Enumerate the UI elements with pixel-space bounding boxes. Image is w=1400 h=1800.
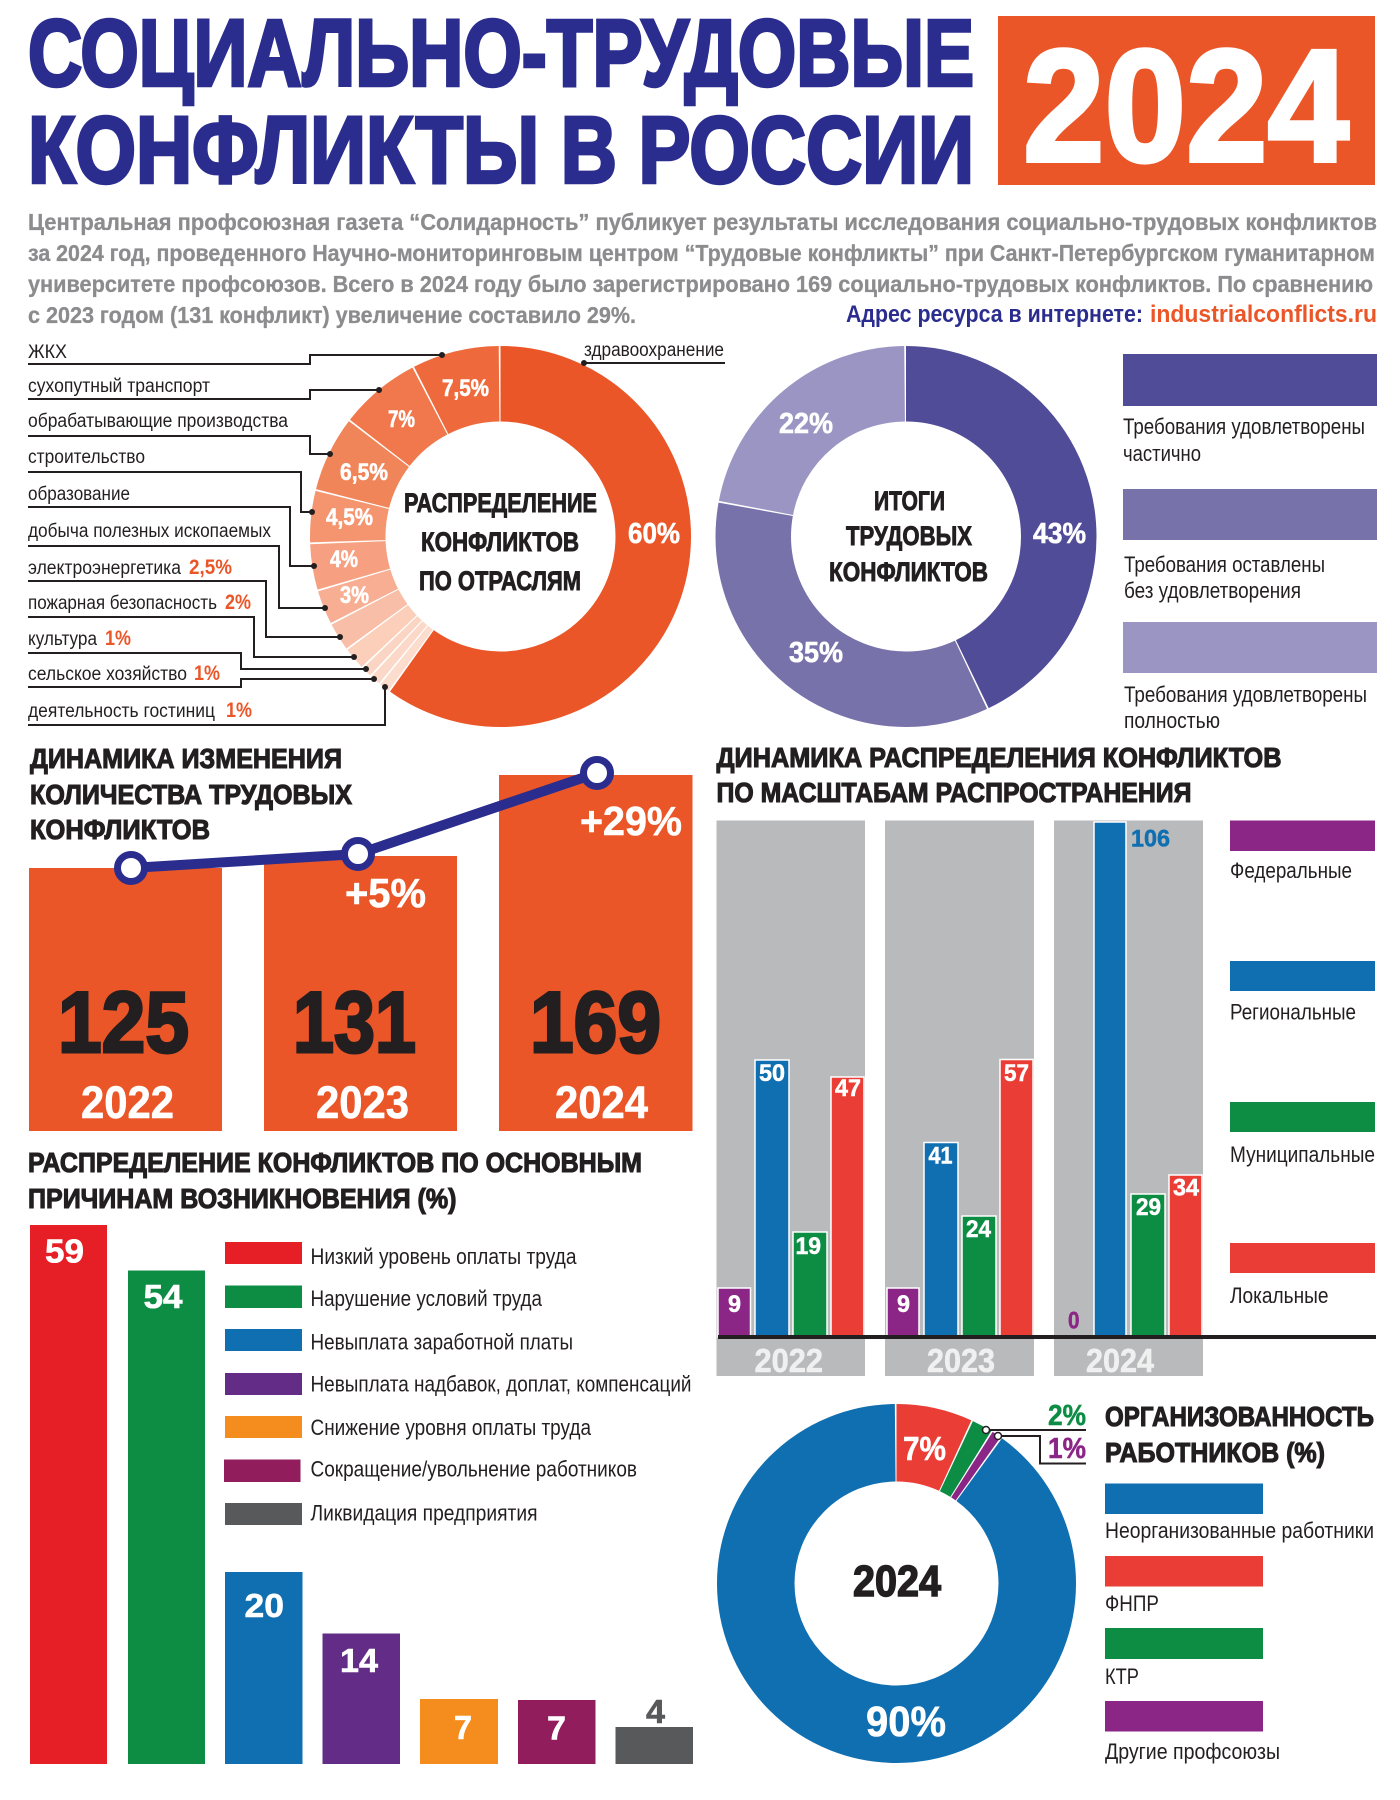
bar: 2023: 2023 [316, 1077, 409, 1128]
donut percentages [326, 375, 680, 609]
legend: fully satisfied: Требования удовлетворены [1124, 682, 1367, 707]
legend: not satisfied [1123, 489, 1377, 603]
legend: layoffs: Сокращение/увольнение работников [310, 1456, 637, 1482]
bar: 2023: +5% [345, 870, 426, 916]
legend: low wages: Низкий уровень оплаты труда [310, 1244, 577, 1269]
group: 2023 [885, 820, 1034, 1379]
panel: causes of conflicts [28, 1147, 693, 1764]
donut center title [404, 488, 597, 596]
results percentages: 35% [789, 637, 843, 669]
legend: локальные [1230, 1243, 1375, 1308]
donut center title: ПО ОТРАСЛЯМ [419, 566, 581, 596]
group: 2024 [1054, 820, 1203, 1379]
bar: 7 magenta [518, 1700, 596, 1764]
label: деятельность гостиниц [28, 684, 388, 725]
legend: unpaid wages [225, 1329, 573, 1354]
resource address: industrialconflicts.ru [1150, 301, 1377, 328]
label: сельское хозяйство: 1% [194, 662, 220, 685]
donut center title: РАСПРЕДЕЛЕНИЕ [404, 488, 597, 518]
label: пожарная безопасность [28, 591, 357, 660]
label: пожарная безопасность: пожарная безопасность [28, 593, 217, 614]
donut percentages: 3% [340, 582, 369, 609]
heading: РАСПРЕДЕЛЕНИЕ КОНФЛИКТОВ ПО ОСНОВНЫМ [28, 1147, 642, 1178]
donut values: 2024 [853, 1557, 941, 1606]
bar: 20 [225, 1572, 302, 1764]
donut percentages: 4% [330, 546, 358, 573]
bar: 2023 [264, 856, 457, 1131]
legend: ФНПР: ФНПР [1105, 1591, 1159, 1616]
heading: ДИНАМИКА РАСПРЕДЕЛЕНИЯ КОНФЛИКТОВ [716, 742, 1282, 773]
donut percentages: 4,5% [326, 504, 373, 531]
resource address [846, 301, 1377, 328]
legend: муниципальные [1230, 1102, 1375, 1167]
axis line [718, 1335, 1376, 1339]
bar: 20: 20 [244, 1587, 284, 1624]
year badge: 2024 [1023, 16, 1349, 195]
heading: РАБОТНИКОВ (%) [1105, 1437, 1325, 1468]
group: 2024: 29 [1136, 1194, 1161, 1221]
group: 2023: 41 [928, 1142, 952, 1170]
donut values: 7% [903, 1430, 946, 1467]
bar: 4: 4 [646, 1693, 666, 1730]
donut percentages: 7,5% [442, 375, 489, 402]
legend: fully satisfied [1123, 622, 1377, 733]
bar: 2022: 2022 [81, 1077, 174, 1128]
results center title: КОНФЛИКТОВ [829, 557, 988, 587]
legend: КТР: КТР [1105, 1664, 1139, 1689]
results center title: ТРУДОВЫХ [846, 521, 972, 551]
legend: wage reduction: Снижение уровня оплаты труда [310, 1415, 592, 1440]
label: строительство [28, 447, 315, 515]
label: образование: образование [28, 484, 130, 505]
bar: 2023: 131 [293, 975, 416, 1071]
legend: unpaid allowances: Невыплата надбавок, доплат, компенсаций [310, 1372, 692, 1396]
group: 2023: 9 [897, 1291, 910, 1318]
title: КОНФЛИКТЫ В РОССИИ [28, 98, 974, 204]
panel: results donut [753, 354, 1377, 733]
trend line [118, 760, 610, 882]
legend: liquidation: Ликвидация предприятия [310, 1500, 538, 1526]
donut percentages: 60% [628, 518, 680, 550]
label: ЖКХ: ЖКХ [28, 342, 67, 363]
bar: 2024: 169 [530, 975, 661, 1071]
bar: 59: 59 [45, 1232, 84, 1270]
legend: unpaid wages: Невыплата заработной платы [310, 1330, 573, 1354]
label: сухопутный транспорт: сухопутный транспорт [28, 376, 210, 397]
label: сельское хозяйство [28, 662, 377, 687]
heading: КОЛИЧЕСТВА ТРУДОВЫХ [30, 779, 352, 810]
label: сухопутный транспорт [28, 376, 382, 399]
label: деятельность гостиниц: деятельность гостиниц [28, 701, 215, 722]
label: добыча полезных ископаемых [28, 521, 328, 611]
panel: distribution by industry donut [28, 340, 725, 725]
title: СОЦИАЛЬНО-ТРУДОВЫЕ [28, 0, 974, 106]
bar: 14 [322, 1634, 400, 1764]
legend: региональные: Региональные [1230, 1000, 1356, 1024]
bar: 2022: 125 [58, 975, 189, 1071]
donut center title: КОНФЛИКТОВ [421, 527, 579, 557]
legend: локальные: Локальные [1230, 1283, 1328, 1308]
results percentages [779, 408, 1086, 669]
legend: not satisfied: Требования оставлены [1124, 552, 1325, 577]
legend: wage reduction [225, 1415, 592, 1440]
bar: 2024: 2024 [555, 1077, 648, 1128]
bar: 7 magenta: 7 [547, 1710, 566, 1746]
group: 2022: 2022 [754, 1342, 823, 1379]
bar: 54: 54 [144, 1278, 183, 1315]
label: электроэнергетика [28, 556, 343, 640]
label: образование [28, 484, 317, 569]
bar: 4 [616, 1693, 693, 1764]
group: 2022: 50 [759, 1060, 785, 1087]
legend: partially satisfied: Требования удовлетворены [1123, 414, 1365, 439]
results center title: ИТОГИ [874, 486, 945, 516]
group: 2024: 0 [1068, 1308, 1080, 1334]
legend: partially satisfied [1123, 354, 1377, 466]
legend: other unions: Другие профсоюзы [1105, 1739, 1280, 1764]
group: 2023: 57 [1004, 1060, 1029, 1087]
legend: региональные [1230, 961, 1375, 1024]
label: культура: культура [28, 629, 97, 650]
legend: муниципальные: Муниципальные [1230, 1142, 1375, 1167]
label: обрабатывающие производства: обрабатывающие производства [28, 411, 288, 432]
label: электроэнергетика: электроэнергетика [28, 558, 181, 579]
label: ЖКХ [28, 342, 445, 364]
group: 2022: 9 [728, 1291, 741, 1318]
legend: ФНПР [1105, 1556, 1263, 1616]
intro text: с 2023 годом (131 конфликт) увеличение составило 29%. [28, 302, 636, 328]
donut: industries [348, 384, 653, 689]
group: 2023: 24 [966, 1216, 992, 1243]
group: 2022 [716, 820, 865, 1379]
label: добыча полезных ископаемых: добыча полезных ископаемых [28, 521, 271, 542]
donut: results [753, 384, 1059, 689]
group: 2024: 2024 [1086, 1342, 1155, 1379]
group: 2024: 106 [1131, 826, 1170, 852]
bar: 54 [128, 1270, 205, 1764]
donut values: 90% [866, 1698, 946, 1746]
panel: number of conflicts dynamics [29, 743, 692, 1131]
donut percentages: 6,5% [340, 459, 388, 486]
bar: 2024 [499, 775, 692, 1131]
results center title [829, 486, 988, 587]
legend: working conditions: Нарушение условий труда [310, 1286, 543, 1311]
group: 2022: 19 [796, 1233, 821, 1260]
donut: organization [756, 1443, 1037, 1724]
title [28, 0, 974, 204]
bar: 2022 [29, 868, 222, 1131]
panel: organization of workers [756, 1400, 1374, 1764]
heading [1105, 1401, 1374, 1468]
heading: ПРИЧИНАМ ВОЗНИКНОВЕНИЯ (%) [28, 1183, 456, 1214]
heading: ПО МАСШТАБАМ РАСПРОСТРАНЕНИЯ [716, 777, 1192, 808]
label: деятельность гостиниц: 1% [226, 699, 252, 722]
results percentages: 43% [1033, 518, 1086, 550]
legend: федеральные [1230, 820, 1375, 883]
donut values [853, 1430, 946, 1746]
bar: 59 [30, 1225, 107, 1764]
heading: КОНФЛИКТОВ [30, 814, 210, 845]
legend: layoffs [224, 1456, 637, 1482]
legend: КТР [1105, 1628, 1263, 1689]
panel: scale of conflicts dynamics [716, 742, 1376, 1379]
callout: 1%: 1% [1048, 1433, 1086, 1465]
legend: other unions [1105, 1701, 1280, 1764]
heading: ДИНАМИКА ИЗМЕНЕНИЯ [30, 743, 342, 774]
resource address: Адрес ресурса в интернете: [846, 301, 1143, 328]
bar: 7 orange [420, 1699, 498, 1764]
heading [716, 742, 1282, 808]
callout: 2%: 2% [1048, 1400, 1086, 1432]
label: культура [28, 627, 369, 672]
group: 2024: 34 [1173, 1174, 1200, 1202]
heading [28, 1147, 642, 1214]
group: 2022: 47 [835, 1075, 861, 1102]
legend: low wages [225, 1242, 577, 1269]
label: сельское хозяйство: сельское хозяйство [28, 664, 187, 685]
legend: partially satisfied: частично [1123, 441, 1201, 466]
legend: liquidation [225, 1500, 538, 1526]
bar: 14: 14 [340, 1642, 379, 1679]
legend: not satisfied: без удовлетворения [1124, 578, 1301, 603]
label: здравоохранение: здравоохранение [584, 340, 724, 361]
bar: 7 orange: 7 [454, 1709, 472, 1746]
label: культура: 1% [105, 627, 131, 650]
legend: федеральные: Федеральные [1230, 858, 1352, 883]
results percentages: 22% [779, 408, 833, 440]
intro text [28, 209, 1377, 328]
group: 2023: 2023 [927, 1342, 995, 1379]
callout: 1% [994, 1432, 1086, 1465]
donut percentages: 7% [388, 406, 415, 433]
label: строительство: строительство [28, 447, 145, 468]
legend: unorganized [1105, 1484, 1374, 1543]
legend: working conditions [225, 1286, 543, 1311]
label: электроэнергетика: 2,5% [189, 556, 232, 579]
heading [30, 743, 352, 845]
label: обрабатывающие производства [28, 411, 333, 457]
bar: 2024: +29% [580, 798, 682, 844]
label: пожарная безопасность: 2% [225, 591, 251, 614]
legend: fully satisfied: полностью [1124, 708, 1220, 733]
callout: 2% [982, 1400, 1086, 1434]
